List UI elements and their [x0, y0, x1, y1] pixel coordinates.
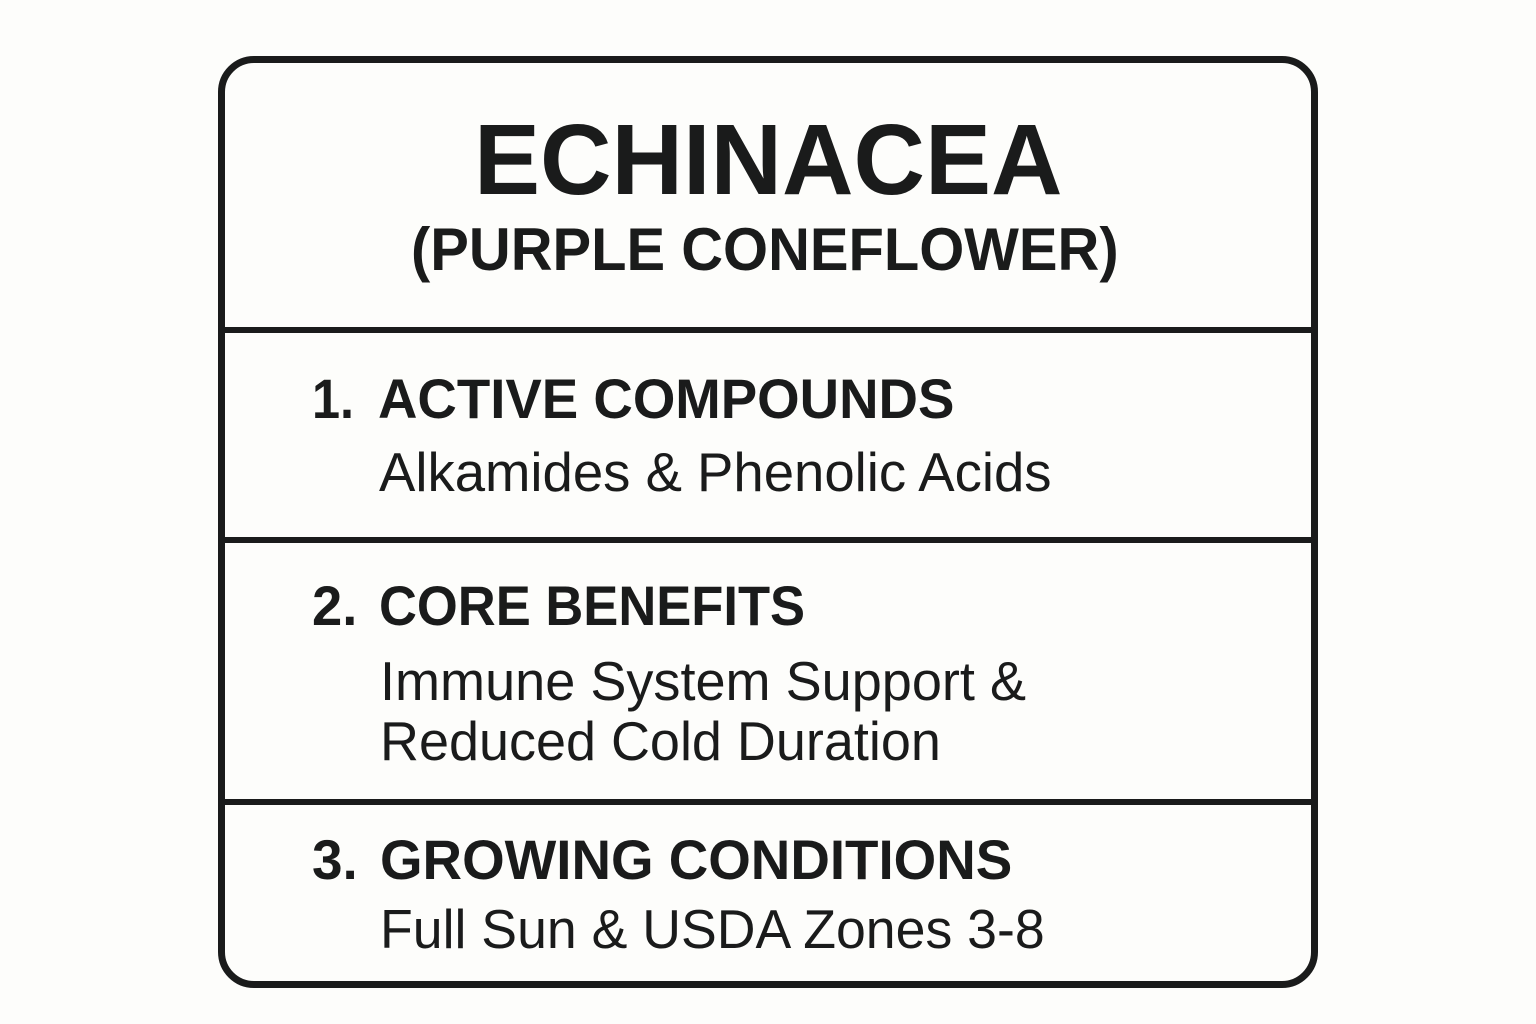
section 1 heading: ACTIVE COMPOUNDS [378, 367, 954, 430]
section 1 [312, 367, 1052, 503]
section 1 text: Alkamides & Phenolic Acids [379, 441, 1052, 503]
section 2 heading: CORE BENEFITS [379, 574, 805, 637]
panel: main card [218, 56, 1318, 988]
section 2 text line 1: Immune System Support & [380, 650, 1026, 712]
section 3 number: 3. [312, 828, 358, 891]
section 2 [312, 574, 1026, 772]
section 2 number: 2. [312, 574, 357, 637]
section 2 text line 2: Reduced Cold Duration [380, 710, 941, 772]
title: ECHINACEA [474, 104, 1063, 216]
subtitle: (PURPLE CONEFLOWER) [411, 216, 1119, 283]
section 3 [312, 828, 1045, 960]
section 3 heading: GROWING CONDITIONS [380, 828, 1012, 891]
section 3 text: Full Sun & USDA Zones 3-8 [380, 898, 1045, 960]
section 1 number: 1. [312, 367, 354, 430]
